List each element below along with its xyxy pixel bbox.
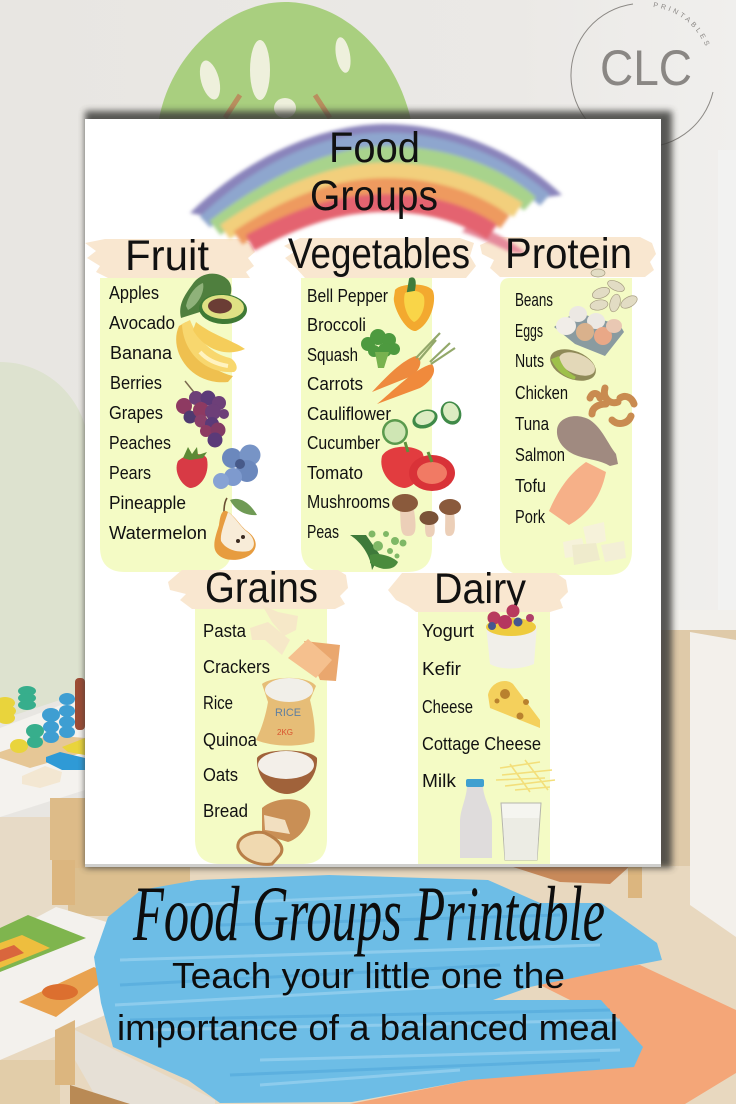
list: grain items	[203, 621, 270, 821]
list: vegetable items: Carrots	[307, 374, 363, 394]
list: protein items: Pork	[515, 507, 546, 527]
logo: CLC Printables: PRINTABLES	[654, 2, 710, 46]
icon: tomatoes	[381, 442, 455, 491]
icon: pasta bows	[250, 605, 298, 655]
icon: bananas	[176, 320, 245, 382]
list: fruit items: Watermelon	[109, 523, 207, 543]
logo: CLC Printables: CLC	[600, 40, 692, 96]
icon: mushrooms	[392, 494, 461, 537]
background: orange rug	[350, 965, 736, 1104]
heading: Fruit: Fruit	[125, 232, 209, 280]
list: protein items: Tuna	[515, 414, 550, 434]
list: grain items: Bread	[203, 801, 248, 821]
list: dairy items: Kefir	[422, 659, 461, 679]
heading: Food Groups: Food	[329, 124, 420, 172]
icon: bell pepper	[394, 278, 434, 331]
brush: protein heading	[480, 237, 656, 277]
panel: fruit background	[100, 278, 232, 572]
list: grain items: Oats	[203, 765, 238, 785]
brush: grains heading	[168, 570, 348, 609]
icon: shredded cheese	[496, 760, 555, 792]
list: grain items: Crackers	[203, 657, 270, 677]
list: grain items: Rice	[203, 693, 233, 713]
list: fruit items: Banana	[110, 343, 173, 363]
heading: Vegetables: Vegetables	[288, 230, 470, 278]
list: protein items: Nuts	[515, 351, 544, 371]
list: protein items	[515, 290, 568, 527]
list: protein items: Chicken	[515, 383, 568, 403]
logo: CLC Printables	[570, 2, 714, 146]
icon: eggs in carton	[554, 306, 624, 356]
background: pale green wall hump	[0, 362, 90, 720]
column: vegetables	[288, 230, 470, 570]
background: right wall and white cabinet	[661, 150, 736, 875]
panel: vegetables background	[301, 278, 432, 572]
icon: yogurt with berries	[486, 604, 537, 668]
icon: salmon fillet	[549, 462, 606, 525]
column: grains	[203, 564, 340, 864]
icon: rice bag	[256, 678, 316, 746]
icon: beans	[589, 269, 639, 313]
card drop shadow	[85, 111, 672, 868]
list: grain items: Pasta	[203, 621, 247, 641]
poster card	[85, 119, 661, 867]
list: vegetable items: Cauliflower	[307, 404, 391, 424]
icon: tofu cubes	[563, 522, 626, 565]
heading: Grains: Grains	[205, 564, 318, 612]
heading: Dairy: Dairy	[434, 565, 526, 613]
heading: Food Groups	[310, 124, 438, 220]
list: fruit items: Pineapple	[109, 493, 186, 513]
toy: red stack	[75, 678, 85, 730]
list: dairy items: Cheese	[422, 697, 473, 717]
list: protein items: Tofu	[515, 476, 546, 496]
background: floor	[0, 632, 736, 1104]
column: dairy	[422, 565, 555, 860]
background: upper shelf with stacking toys	[0, 678, 85, 868]
column: fruit	[109, 232, 260, 560]
list: protein items: Beans	[515, 290, 553, 310]
heading: Food Groups: Groups	[310, 172, 438, 220]
list: vegetable items: Squash	[307, 345, 358, 365]
toy: green stack	[18, 686, 36, 710]
icon: bowl of oats	[257, 750, 317, 794]
subtitle line 1: Teach your little one the	[172, 955, 565, 996]
background: green tree on wall	[158, 2, 412, 125]
list: vegetable items: Bell Pepper	[307, 286, 388, 306]
panel: protein background	[500, 278, 632, 575]
list: fruit items: Apples	[109, 283, 159, 303]
toy: blue stacks	[42, 693, 75, 743]
list: protein items: Salmon	[515, 445, 565, 465]
list: dairy items: Milk	[422, 771, 457, 791]
icon: cheese wedge	[488, 681, 540, 728]
list: fruit items: Berries	[110, 373, 162, 393]
panel: dairy background	[418, 610, 550, 864]
icon: crackers	[288, 639, 340, 681]
list: fruit items: Peaches	[109, 433, 171, 453]
icon: rice bag: RICE	[275, 707, 301, 719]
icon: avocado	[180, 274, 248, 325]
brush: dairy heading	[388, 573, 568, 612]
list: vegetable items: Tomato	[307, 463, 363, 483]
background: lower shelf with puzzle boards	[0, 860, 215, 1104]
brush: fruit heading	[85, 239, 255, 278]
icon: peas	[350, 530, 406, 570]
list: protein items: Eggs	[515, 321, 543, 341]
list: fruit items: Grapes	[109, 403, 163, 423]
list: dairy items	[422, 621, 541, 791]
icon: blueberries	[213, 444, 260, 489]
icon: pistachio	[546, 343, 600, 387]
icon: pear	[214, 498, 257, 560]
icon: cashews	[590, 388, 634, 423]
brush: vegetables heading	[284, 238, 476, 278]
icon: broccoli	[361, 329, 400, 368]
brush: blue paint stroke	[94, 875, 662, 1103]
icon: rice bag: 2KG	[277, 728, 293, 737]
list: vegetable items: Cucumber	[307, 433, 380, 453]
rainbow	[190, 124, 562, 254]
list: vegetable items: Mushrooms	[307, 492, 390, 512]
heading: Protein: Protein	[505, 230, 632, 278]
icon: strawberry	[177, 447, 208, 488]
list: fruit items: Avocado	[109, 313, 175, 333]
list: vegetable items: Broccoli	[307, 315, 366, 335]
list: fruit items: Pears	[109, 463, 151, 483]
subtitle line 2: importance of a balanced meal	[117, 1007, 618, 1048]
icon: carrots	[372, 333, 455, 404]
column: protein	[505, 230, 639, 565]
list: fruit items	[109, 283, 207, 543]
toy: yellow stack	[0, 697, 16, 724]
list: dairy items: Cottage Cheese	[422, 734, 541, 754]
icon: milk bottle	[460, 779, 492, 858]
panel: grains background	[195, 608, 327, 864]
list: vegetable items	[307, 286, 391, 542]
icon: chicken drumstick	[557, 416, 618, 466]
list: vegetable items: Peas	[307, 522, 339, 542]
icon: cucumber slices	[382, 398, 465, 445]
icon: bread	[238, 799, 310, 864]
icon: glass of milk	[501, 803, 541, 860]
list: dairy items: Yogurt	[422, 621, 474, 641]
list: grain items: Quinoa	[203, 730, 258, 750]
icon: grapes	[176, 381, 229, 448]
